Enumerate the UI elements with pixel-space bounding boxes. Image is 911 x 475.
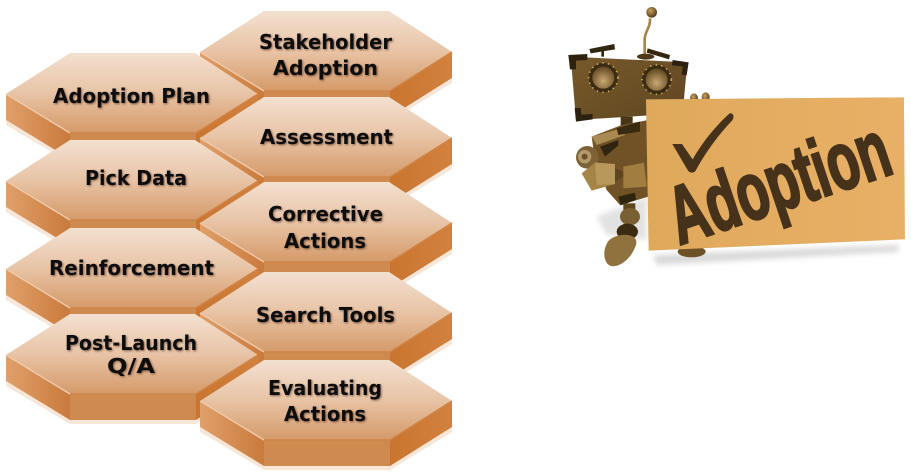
- robot torso: [592, 120, 648, 205]
- hexagon: Reinforcement: Reinforcement: [49, 256, 214, 280]
- hexagon: Evaluating Actions: Evaluating: [268, 376, 382, 400]
- robot shoulder joint: [576, 146, 599, 169]
- hexagon: Corrective Actions: Actions: [284, 229, 366, 253]
- hexagon: Stakeholder Adoption: Stakeholder: [259, 30, 393, 54]
- hexagon: Stakeholder Adoption: Adoption: [273, 56, 378, 80]
- robot right eye: [642, 65, 671, 94]
- hexagon: Post-Launch Q/A: [6, 314, 258, 424]
- robot head: [571, 57, 687, 120]
- hexagon: Pick Data: Pick Data: [85, 166, 187, 190]
- hexagon: Post-Launch Q/A: Q/A: [107, 354, 155, 378]
- check mark: [672, 113, 734, 173]
- hexagon: Evaluating Actions: [200, 360, 452, 470]
- panel: hexagon process stack: [6, 11, 452, 470]
- hexagon: Corrective Actions: [200, 182, 452, 292]
- robot antenna: [637, 7, 657, 60]
- illustration: robot holding Adoption sign: [568, 7, 905, 266]
- hexagon: Stakeholder Adoption: [200, 11, 452, 121]
- hexagon: Pick Data: [6, 140, 258, 250]
- hexagon: Adoption Plan: [6, 53, 258, 163]
- hexagon: Search Tools: Search Tools: [256, 303, 395, 327]
- hexagon: Assessment: Assessment: [260, 125, 393, 149]
- hexagon: Corrective Actions: Corrective: [268, 202, 383, 226]
- sign thumbs: [690, 92, 710, 103]
- sign board: [646, 97, 905, 251]
- robot foot: [604, 235, 636, 266]
- robot far foot: [678, 246, 706, 257]
- hexagon: Assessment: [200, 97, 452, 207]
- hexagon: Reinforcement: [6, 228, 258, 338]
- robot left eye: [589, 63, 618, 92]
- sign and robot ground shadows: [597, 197, 898, 265]
- robot head corner plates: [568, 54, 689, 122]
- hexagon: Post-Launch Q/A: Post-Launch: [65, 331, 197, 355]
- hexagon: Adoption Plan: Adoption Plan: [53, 84, 210, 108]
- hexagon: Search Tools: [200, 272, 452, 382]
- robot arm: [582, 163, 647, 191]
- robot leg: [617, 203, 640, 240]
- robot neck: [621, 117, 633, 133]
- robot head brackets: [589, 44, 670, 59]
- hexagon: Evaluating Actions: Actions: [284, 402, 366, 426]
- robot fingers: [647, 168, 663, 186]
